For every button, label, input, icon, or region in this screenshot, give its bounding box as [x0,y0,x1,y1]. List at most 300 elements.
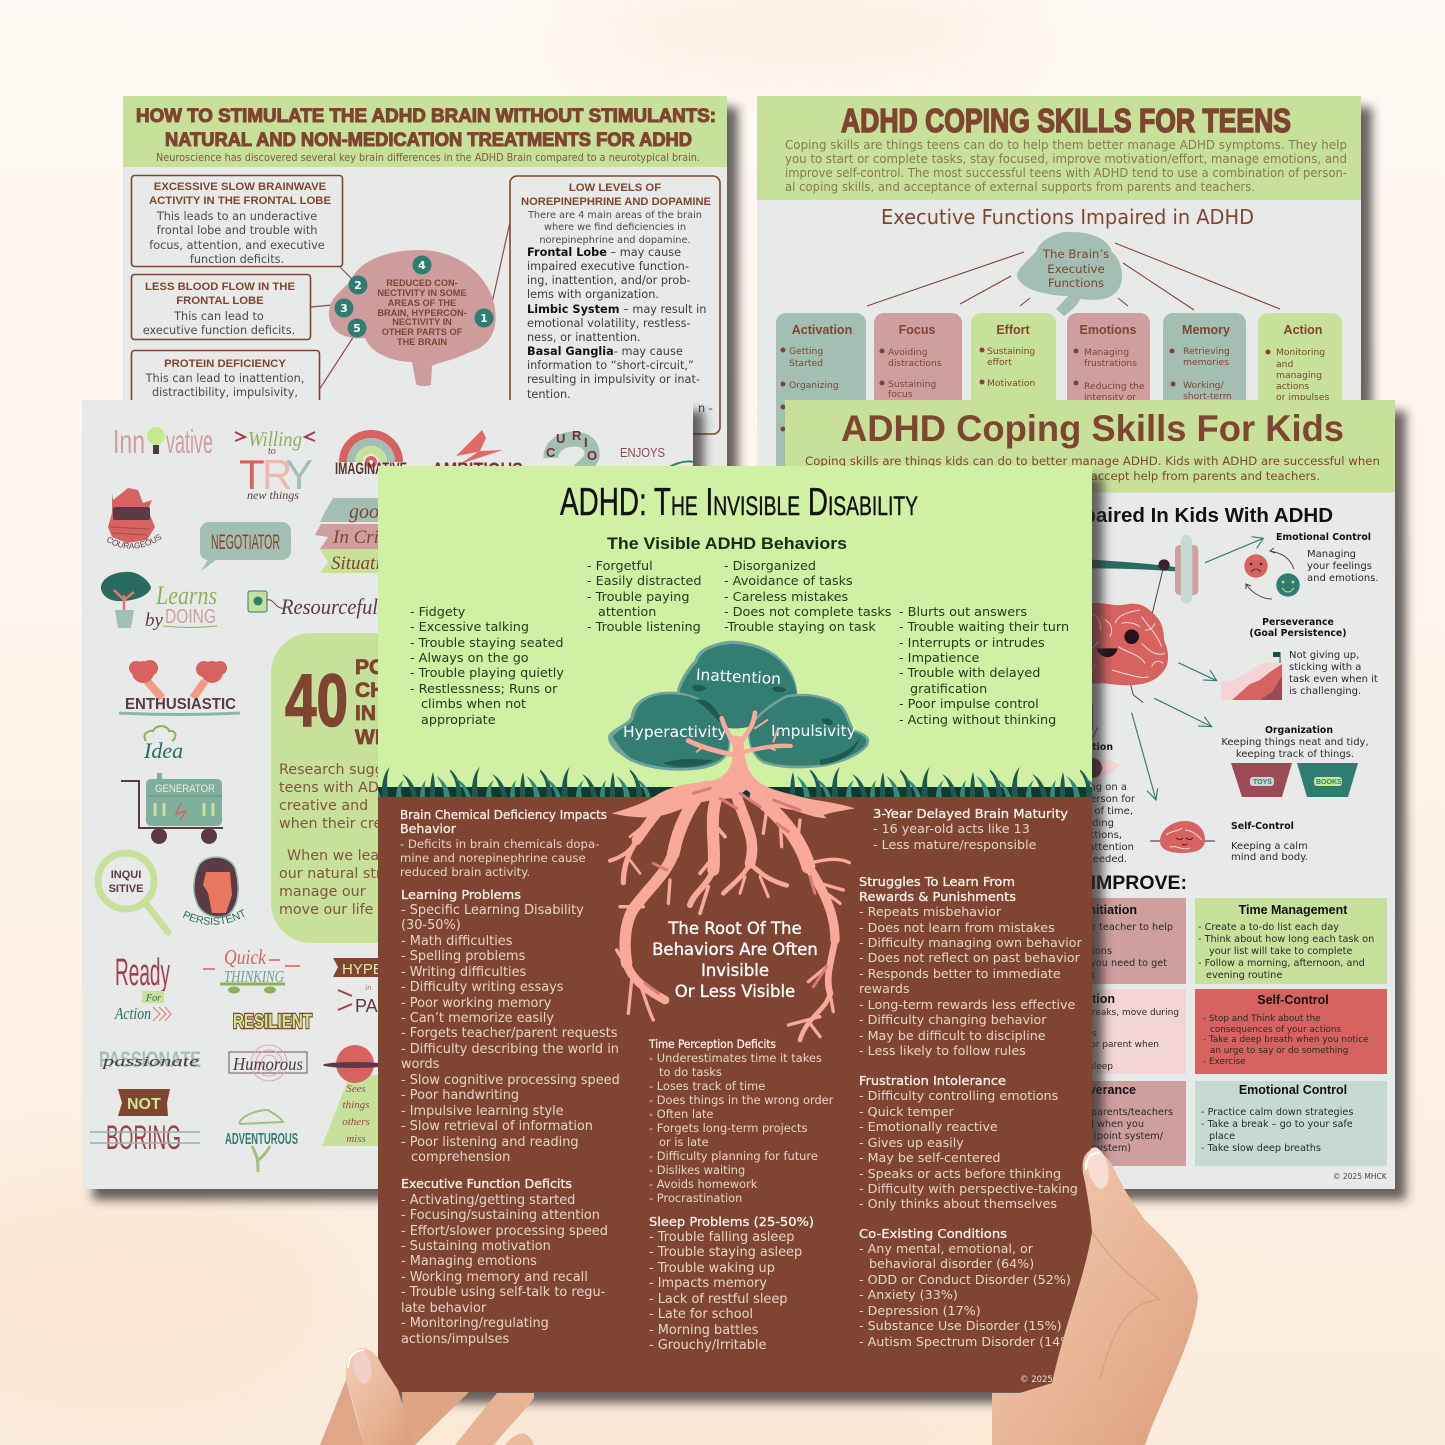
box: action: actions [1276,381,1309,392]
icon: pink brain [329,250,496,386]
doodle: passionate: passionate [102,1054,200,1070]
doodle: curious: R [572,428,582,443]
callout: 40 positive characteristics: POSITIVE [355,656,452,679]
list: co-existing conditions: - Autism Spectrum Disorder (14%) [859,1334,1077,1349]
list: sleep problems: - Grouchy/Irritable [649,1338,767,1353]
list: impulsivity behaviors: - Poor impulse control [899,697,1039,712]
box: emotions: intensity or [1084,392,1136,403]
doodle: ready for action: Ready [115,952,170,994]
doodle: inquisitive magnifier: SITIVE [109,883,143,895]
doodle: ambitious: AMBITIOUS [432,459,523,482]
callout: protein deficiency: distractibility, impulsivity, [152,386,298,399]
box: time management: - Think about how long each task on [1198,934,1374,945]
doodle: innovative: Inn [113,423,145,460]
skill: attention: avoiding [1071,818,1114,829]
callout: 40 positive characteristics: Research suggests [279,762,413,778]
list: learning problems: (30-50%) [401,918,461,933]
callout: norepinephrine and dopamine: There are 4 main areas of the brain [527,210,702,221]
list: rewards and punishments: - Less likely to follow rules [859,1043,1026,1058]
callout: slow brainwave: focus, attention, and executive [149,239,325,252]
box: motivation: teacher or parent when [1053,1040,1159,1050]
list: rewards and punishments: - Difficulty managing own behavior [859,935,1083,950]
icon: pink brain: AREAS OF THE [388,298,456,308]
skill: organization: Organization [1265,725,1333,736]
list: executive function deficits: late behavior [401,1301,487,1316]
box: action: and [1276,359,1293,370]
doodle: hyper passion: HYPER [342,961,394,978]
doodle: not boring: NOT [127,1096,161,1113]
copyright: © 2025 MHCK [1333,1172,1388,1181]
box: motivation: Attention [1060,992,1115,1006]
callout: slow brainwave: ACTIVITY IN THE FRONTAL LOBE [149,195,331,207]
icon: pink brain: OTHER PARTS OF [382,327,463,337]
list: learning problems: Learning Problems [401,887,521,902]
tree labels [623,666,856,741]
section heading: Executive Functions Impaired In Kids With ADHD [854,504,1333,527]
doodle: willing to try new things: R [262,451,292,498]
box: action: Action [1284,323,1322,337]
list: co-existing conditions: Co-Existing Conditions [859,1226,1007,1241]
callout: 40 positive characteristics: creative and [279,798,368,814]
skill: attention: a period of time, [1050,806,1133,817]
caption: root of the behaviors: Behaviors Are Often [652,940,818,959]
box: emotional control: - Practice calm down strategies [1201,1107,1353,1118]
box: time management: Time Management [1239,903,1348,917]
list: learning problems: - Poor handwriting [401,1088,519,1103]
doodle: enjoys: ENJOYS [620,445,665,460]
box: memory: short-term [1183,391,1232,402]
doodle: imaginative rainbow: IMAGINATIVE [335,459,407,478]
box: self-control: consequences of your actions [1210,1025,1341,1035]
intro paragraph: Coping skills are things teens can do to help them better manage ADHD symptoms. They help [785,138,1347,152]
list: brain chemical deficiency: reduced brain activity. [400,865,530,879]
doodle: enthusiastic [119,660,240,714]
list: learning problems: - Forgets teacher/parent requests [401,1026,618,1041]
list: executive function deficits: - Activating/getting started [401,1193,575,1208]
box: motivation: Get sleep [1070,1062,1113,1072]
box: activation: Getting [789,346,823,357]
list: executive function deficits: - Managing emotions [401,1254,537,1269]
box: motivation [1000,989,1186,1074]
doodle: quick thinking: THINKING [224,967,284,986]
icon: pink brain: NECTIVITY IN SOME [377,288,467,298]
box: perseverance: finish (point system/ [1064,1131,1164,1142]
tree labels: Inattention [696,666,781,688]
box: self-control: - Exercise [1203,1057,1246,1067]
box: time management: your list will take to complete [1209,946,1352,957]
icon: pink brain: 4 [418,259,426,272]
intro paragraph: you to start or complete tasks, stay focused, improve motivation/effort, manage emotions, and [785,152,1347,166]
list: inattention behaviors: - Easily distracted [587,574,702,589]
illustration: tree canopy [608,641,869,771]
list: frustration intolerance: - Quick temper [859,1104,955,1119]
list: hyperactivity behaviors: - Trouble staying seated [410,636,564,651]
list: frustration intolerance: Frustration Intolerance [859,1073,1006,1088]
box: emotions: Emotions [1080,323,1137,337]
icon: brain cloud: Functions [1048,276,1104,290]
icon: pink brain: 2 [354,279,362,292]
callout: blood flow: FRONTAL LOBE [176,295,264,307]
box: emotional control: - Take a break – go to your safe [1201,1119,1353,1130]
callout: 40 positive characteristics: 40 [285,659,348,742]
list: brain chemical deficiency: Behavior [400,821,457,836]
intro paragraph: improve self-control. The most successful teens with ADHD tend to use a combination of person- [785,166,1347,180]
box: initiation: Instructions [1055,946,1112,957]
list: brain chemical deficiency [400,807,607,879]
box: motivation: lessons [1064,1029,1097,1039]
box: action: or impulses [1276,392,1329,403]
skill: attention [1046,742,1136,865]
box: time management: - Follow a morning, afternoon, and [1198,958,1365,969]
grass strip [378,766,1092,798]
list: frustration intolerance [859,1073,1078,1211]
skill: perseverance [1221,617,1378,700]
skill: attention: Focusing on a [1058,782,1127,793]
box: emotional control: Emotional Control [1239,1083,1347,1097]
box: initiation: task [1075,970,1095,981]
callout: 40 positive characteristics: teens with ADHD [279,780,401,796]
doodle: not boring [90,1089,200,1157]
doodle: humorous [229,1045,307,1081]
callout: norepinephrine and dopamine: LOW LEVELS OF [569,182,661,194]
list: time perception deficits: - Difficulty planning for future [649,1149,818,1163]
doodle: resilient: RESILIENT [233,1011,312,1033]
doodle: ready for action [114,952,171,1023]
doodle: hyper passion [333,958,434,1016]
list: co-existing conditions: - Any mental, emotional, or [859,1241,1034,1256]
list: time perception deficits: - Dislikes waiting [649,1163,745,1177]
callout: norepinephrine and dopamine: norepinephrine and dopamine. [539,235,691,246]
list: executive function deficits: - Monitoring/regulating [401,1316,549,1331]
list: sleep problems: - Late for school [649,1307,753,1322]
subheading: visible behaviors: The Visible ADHD Behaviors [607,534,847,553]
list: rewards and punishments: rewards [859,981,910,996]
list: co-existing conditions [859,1226,1077,1349]
box: activation: Organizing [789,380,839,391]
callout: norepinephrine and dopamine: emotional volatility, restless- [527,317,691,330]
box: activation [776,313,866,473]
doodle: willing to try new things: T [239,451,265,498]
doodle: resourceful plug: Resourceful [280,594,378,619]
list: co-existing conditions: - Substance Use Disorder (15%) [859,1318,1062,1333]
illustration: tree trunk and roots [610,713,855,1040]
list: learning problems: - Impulsive learning style [401,1104,564,1119]
intro paragraph: they use coping skills and accept help from parents and teachers. [937,469,1320,483]
callout: slow brainwave: frontal lobe and trouble with [157,224,317,237]
doodle: good in crisis situations banners: good [349,501,390,523]
skill: self-control [1150,821,1308,863]
list: sleep problems: - Morning battles [649,1323,759,1338]
box: action: managing [1276,370,1322,381]
list: learning problems: - Difficulty writing essays [401,980,564,995]
doodle: learns by doing: Learns [155,581,217,610]
list: hyperactivity behaviors: - Always on the go [410,651,529,666]
list: rewards and punishments: - Difficulty changing behavior [859,1012,1047,1027]
list: time perception deficits: - Loses track of time [649,1079,765,1093]
callout: norepinephrine and dopamine: tention. [527,388,571,401]
box: initiation: Task Initiation [1054,903,1137,917]
box: time management: evening routine [1206,970,1282,981]
callout: 40 positive characteristics: IN [355,702,376,725]
box: emotional control: place [1209,1131,1235,1142]
list: rewards and punishments: - May be difficult to discipline [859,1028,1046,1043]
list: time perception deficits: - Procrastination [649,1191,742,1205]
doodle: good in crisis situations banners [315,498,407,574]
doodle: learns by doing: by [145,610,164,631]
list: impulsivity behaviors: - Trouble with delayed [899,666,1040,681]
list: delayed brain maturity [873,806,1069,852]
box: focus: focus [888,389,913,400]
icon: pink brain: 1 [480,312,488,325]
callout: norepinephrine and dopamine [510,176,720,434]
list: executive function deficits: - Focusing/sustaining attention [401,1208,600,1223]
list: executive function deficits: - Trouble using self-talk to regu- [401,1285,606,1300]
list: time perception deficits: - Does things in the wrong order [649,1093,834,1107]
callout: protein deficiency: This can lead to inattention, [145,372,304,385]
list: learning problems: - Specific Learning Disability [401,903,584,918]
box: perseverance: token system) [1062,1143,1131,1154]
callout: norepinephrine and dopamine: resulting in impulsivity or inat- [527,373,700,386]
box: emotions: Reducing the [1084,381,1145,392]
skill: self-control: Keeping a calm [1231,841,1308,852]
doodle: curious [546,428,597,480]
doodle: willing to try new things: to [268,446,276,457]
illustration: right hand holding poster [992,1145,1198,1445]
icon: pink brain: NECTIVITY IN [392,317,452,327]
list: learning problems: comprehension [411,1150,510,1165]
panel: coping skills for kids [785,400,1395,1189]
copyright: © 2025 MHCK [1020,1375,1081,1385]
box: emotions: frustrations [1084,358,1137,369]
doodle: willing to try new things: Willing [248,427,302,451]
list: inattention behaviors: - Forgetful [587,559,653,574]
doodle: willing to try new things: new things [247,488,299,502]
skill: attention: shifting attention [1048,842,1134,853]
box: perseverance: Ask parents/teachers [1070,1107,1173,1118]
list: time perception deficits: Time Perception Deficits [648,1037,776,1051]
subtitle: Neuroscience has discovered several key brain differences in the ADHD Brain compared to a neurotypical brain. [156,151,700,164]
list: impulsivity behaviors: - Acting without thinking [899,713,1056,728]
doodle: curious: C [546,445,556,460]
skill: organization: BOOKS [1316,779,1342,786]
doodle: curious: I [584,435,588,450]
box: self-control: an urge to say or do something [1210,1046,1348,1056]
callout: norepinephrine and dopamine: where we find deficiencies in [544,222,686,233]
callout: norepinephrine and dopamine: Basal Ganglia [527,345,614,358]
box: perseverance [1000,1081,1186,1166]
list: hyperactivity behaviors: climbs when not [421,697,526,712]
tree labels: Hyperactivity [623,723,727,741]
skill: perseverance: sticking with a [1289,662,1361,673]
callout: 40 positive characteristics: manage our [279,884,366,900]
list: sleep problems: - Trouble falling asleep [649,1230,794,1245]
skill: attention: task or person for [1046,794,1136,805]
doodle: negotiator speech bubble [200,522,291,571]
list: sleep problems: - Trouble waking up [649,1261,775,1276]
list: hyperactivity behaviors: - Excessive talking [410,620,529,635]
doodle: idea generator: Idea [143,738,183,763]
doodle: persistent fist: PERSISTENT [182,909,244,925]
list: learning problems: - Difficulty describing the world in [401,1042,619,1057]
doodle: quick thinking [203,945,300,994]
list: sleep problems: Sleep Problems (25-50%) [649,1214,814,1229]
list: hyperactivity behaviors: - Restlessness; Runs or [410,682,558,697]
list: frustration intolerance: - May be self-centered [859,1150,1000,1165]
list: inattention behaviors: - Trouble listening [587,620,701,635]
box: perseverance: reward when you [1060,1119,1144,1130]
list: co-existing conditions: - Depression (17%) [859,1303,981,1318]
list: inattention behaviors: - Trouble paying [587,590,690,605]
caption: root of the behaviors: The Root Of The [667,919,802,938]
list: impulsivity behaviors: - Trouble waiting their turn [899,620,1069,635]
skill: organization: Keeping things neat and tidy, [1221,737,1369,748]
list: sleep problems: - Trouble staying asleep [649,1245,802,1260]
box: memory: Memory [1182,323,1230,337]
skill: perseverance: (Goal Persistence) [1249,628,1347,639]
box: self-control: Self-Control [1257,993,1329,1007]
list: co-existing conditions: - Anxiety (33%) [859,1287,958,1302]
callout: norepinephrine and dopamine: information to “short-circuit,” [527,359,694,372]
skill: perseverance: task even when it [1289,674,1378,685]
callout: slow brainwave: function deficits. [190,253,284,266]
box: initiation: Ask your teacher to help [1054,922,1173,933]
doodle: sees things others miss: miss [346,1133,366,1145]
box: effort: Effort [996,323,1030,337]
skill: emotional control [1244,532,1379,599]
doodle: innovative [113,423,213,460]
box: motivation: Take breaks, move during [1062,1008,1179,1018]
doodle: sees things others miss: Sees [346,1083,366,1095]
section heading: Executive Functions Impaired in ADHD [881,205,1254,229]
box: time management [1195,898,1387,984]
arrows [1092,537,1263,800]
connector lines [311,222,510,390]
box: self-control [1195,989,1387,1074]
list: rewards and punishments: - Long-term rewards less effective [859,997,1076,1012]
list: hyperactivity behaviors: - Fidgety [410,605,466,620]
list: time perception deficits: or is late [659,1135,709,1149]
skill: emotional control: and emotions. [1307,573,1379,584]
box: emotions [1067,313,1150,433]
list: impulsivity behaviors: - Blurts out answers [899,605,1027,620]
callout: 40 positive characteristics [271,633,571,943]
callout: norepinephrine and dopamine: ness, or inattention. [527,331,641,344]
box: activation: Started [789,358,823,369]
callout: slow brainwave [132,176,342,266]
box: focus: Sustaining [888,379,936,390]
list: inattention behaviors continued: - Careless mistakes [724,590,849,605]
doodle: good in crisis situations banners: In Crisis [332,527,399,548]
list: rewards and punishments: - Repeats misbehavior [859,904,1002,919]
doodle: idea generator [121,726,223,844]
list: time perception deficits [648,1037,834,1205]
list: time perception deficits: - Often late [649,1107,713,1121]
skill: attention: when needed. [1056,854,1127,865]
box: time management: - Create a to-do list each day [1198,922,1339,933]
doodle: quick thinking: Quick [224,945,267,969]
callout: blood flow: This can lead to [173,310,264,323]
skill: attention: Attention [1063,742,1113,753]
box: focus [874,313,962,433]
list: brain chemical deficiency: Brain Chemical Deficiency Impacts [400,807,607,822]
doodle: hyper passion: PASSION [355,996,434,1016]
skill: perseverance: Perseverance [1262,617,1334,628]
list: time perception deficits: to do tasks [659,1065,722,1079]
list: learning problems: words [401,1057,440,1072]
doodle: resourceful plug [248,591,378,619]
callout: slow brainwave: EXCESSIVE SLOW BRAINWAVE [154,181,327,193]
doodle: sees things others miss: others [342,1116,370,1128]
list: co-existing conditions: - ODD or Conduct Disorder (52%) [859,1272,1071,1287]
box: memory: Working/ [1183,380,1224,391]
icon: pink brain: THE BRAIN [397,337,447,347]
doodle: curious: O [587,448,597,463]
list: time perception deficits: - Avoids homework [649,1177,758,1191]
list: learning problems: - Poor working memory [401,996,552,1011]
list: inattention behaviors: attention [598,605,656,620]
intro paragraph: al coping skills, and acceptance of external supports from parents and teachers. [785,180,1255,194]
box: action [1258,313,1342,433]
doodle: hyper passion: in [365,983,371,992]
list: executive function deficits: actions/impulses [401,1332,509,1347]
list: learning problems: - Writing difficulties [401,965,527,980]
box: memory: memories [1183,357,1229,368]
doodle: good in crisis situations banners: Situations [331,553,407,574]
box: activation: Activation [792,323,852,337]
list: frustration intolerance: - Emotionally reactive [859,1119,998,1134]
heading: stimulate the brain: HOW TO STIMULATE THE ADHD BRAIN WITHOUT STIMULANTS: [136,106,716,127]
section heading: skills to improve: SKILLS TO IMPROVE: [984,872,1187,894]
doodle: innovative: vative [166,423,213,460]
skill: self-control: mind and body. [1231,852,1308,863]
callout: 40 positive characteristics: our natural strengths [279,866,431,882]
doodle: idea generator: GENERATOR [155,783,215,795]
list: inattention behaviors continued: - Disorganized [724,559,816,574]
callout: norepinephrine and dopamine: lems with organization. [527,288,659,301]
icon: pink brain: 5 [353,322,361,335]
callout: norepinephrine and dopamine: NOREPINEPHRINE AND DOPAMINE [521,196,711,208]
list: rewards and punishments: - Does not reflect on past behavior [859,950,1081,965]
connector lines [867,243,1280,310]
box: initiation: what you need to get [1063,958,1167,969]
list: sleep problems: - Lack of restful sleep [649,1292,787,1307]
icon: pink brain: 3 [340,302,348,315]
skill: emotional control: Managing [1307,549,1356,560]
list: time perception deficits: - Underestimates time it takes [649,1051,822,1065]
heading: coping skills for teens: ADHD COPING SKILLS FOR TEENS [841,102,1291,139]
skill: perseverance: is challenging. [1289,686,1361,697]
box: effort [971,313,1056,433]
list: inattention behaviors continued: - Does not complete tasks [724,605,892,620]
panel: coping skills for teens [757,96,1361,473]
skill: self-control: Self-Control [1231,821,1294,832]
list: frustration intolerance: - Only thinks about themselves [859,1196,1057,1211]
doodle: inquisitive magnifier: INQUI [111,869,141,881]
box: effort: Motivation [987,378,1036,389]
doodle: persistent fist [182,856,244,925]
box: initiation [1000,898,1186,984]
panel: ADHD the invisible disability [378,466,1092,1392]
box: self-control: - Stop and Think about the [1203,1014,1321,1024]
list: brain chemical deficiency: - Deficits in brain chemicals dopa- [400,837,599,851]
list: executive function deficits [401,1176,608,1347]
list: executive function deficits: - Working memory and recall [401,1270,588,1285]
list: learning problems: - Math difficulties [401,934,513,949]
box: focus: Focus [899,323,935,337]
box: effort: Sustaining [987,346,1035,357]
list: rewards and punishments: Struggles To Learn From [859,874,1015,889]
list: learning problems: - Poor listening and reading [401,1135,579,1150]
